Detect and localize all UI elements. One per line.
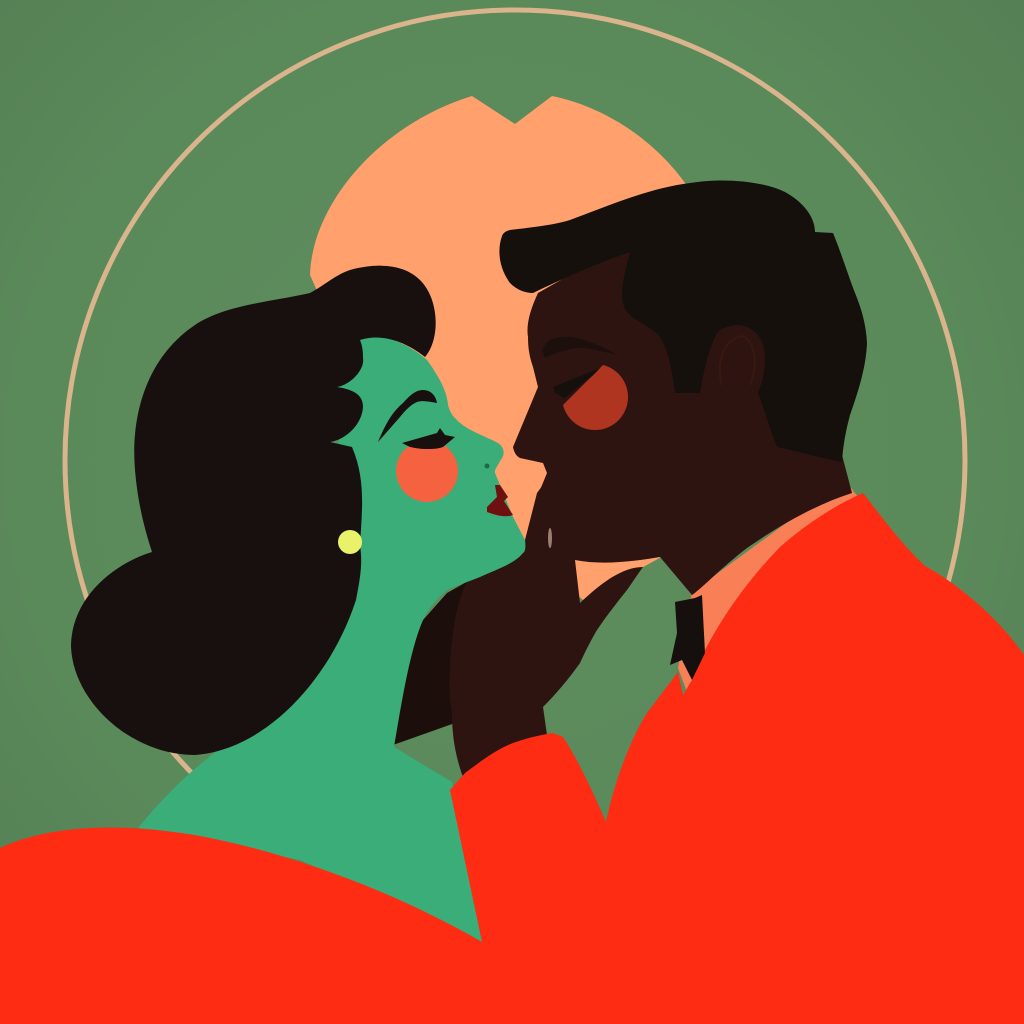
ear detail <box>720 336 755 385</box>
finger gap <box>548 528 552 548</box>
face and neck <box>513 235 852 595</box>
nostril <box>484 464 490 468</box>
red jacket and dress <box>0 493 1024 1024</box>
shirt collar <box>678 480 858 700</box>
palm and fingers <box>449 482 643 777</box>
eyebrow <box>542 337 617 358</box>
cheek <box>563 365 628 430</box>
eyelash <box>553 368 600 398</box>
eyebrow <box>378 390 437 442</box>
skin <box>138 337 525 942</box>
woman: hair <box>71 266 436 755</box>
lips <box>487 485 513 516</box>
eyelid and lashes <box>402 428 455 449</box>
peach heart <box>310 96 700 600</box>
bow tie <box>670 595 705 680</box>
man: head and neck <box>499 180 867 595</box>
gold ring <box>65 10 965 910</box>
cheek <box>396 440 458 502</box>
earring <box>338 530 362 554</box>
man's hand <box>449 482 643 777</box>
shadow behind neck <box>393 580 470 745</box>
hair <box>499 180 867 462</box>
woman: face, neck and chest <box>138 337 525 942</box>
